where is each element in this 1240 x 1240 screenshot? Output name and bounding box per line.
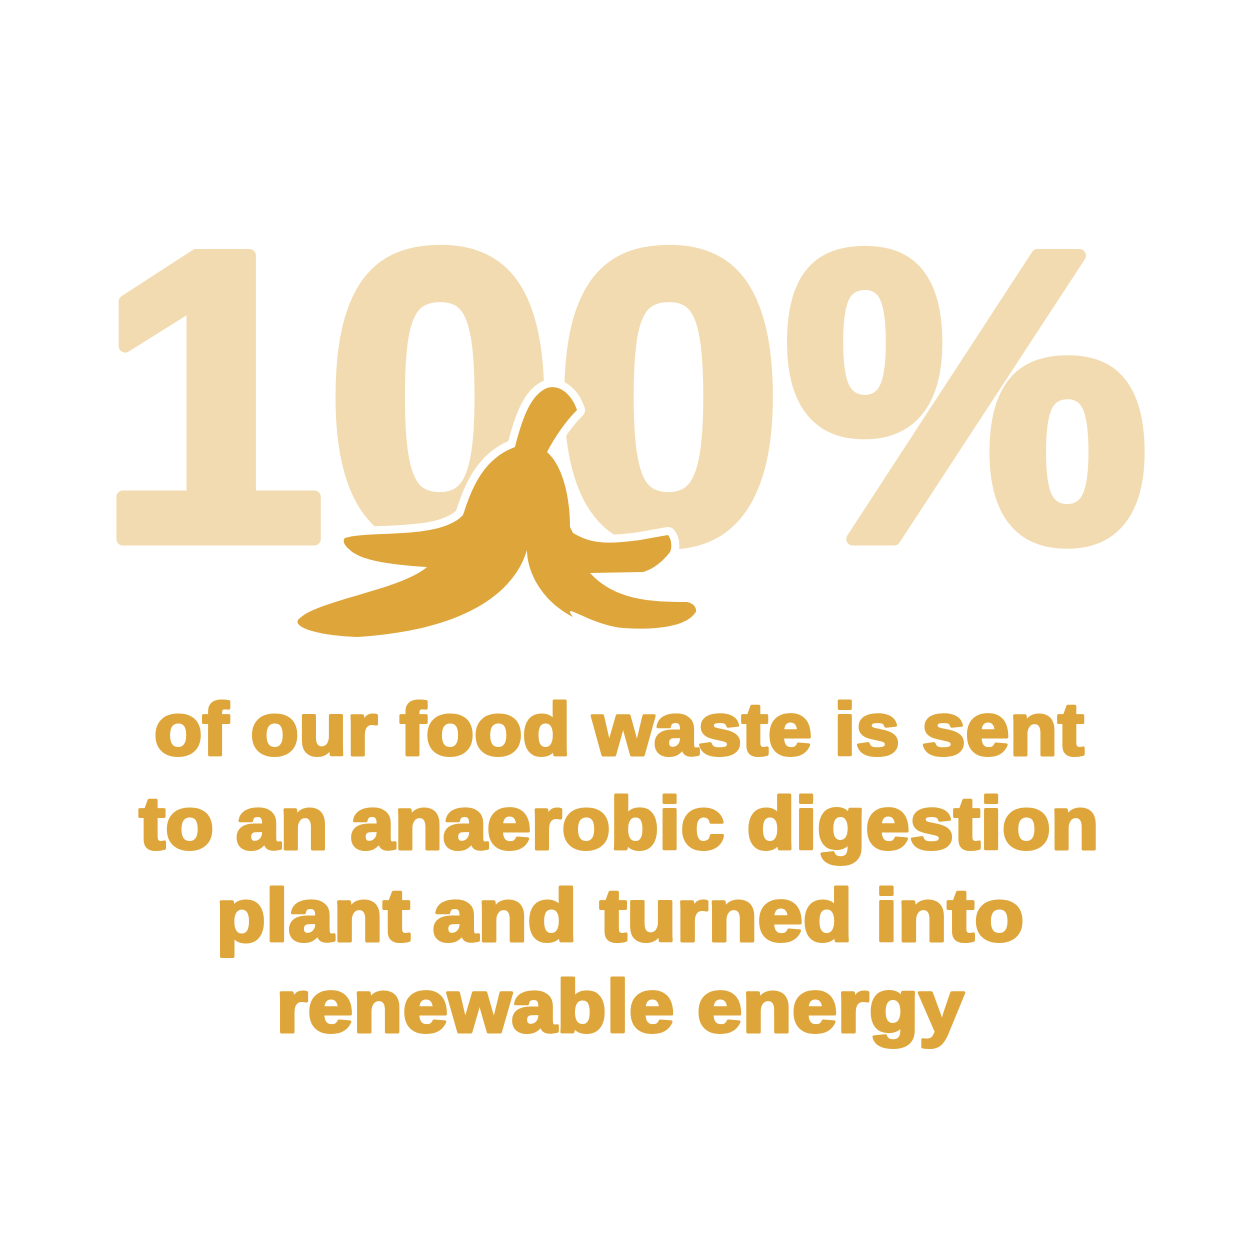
caption text: of our food waste is sent [154, 688, 1084, 771]
caption text [139, 688, 1099, 1048]
caption text: plant and turned into [216, 874, 1024, 957]
icon: banana peel [297, 387, 696, 637]
caption text: renewable energy [276, 965, 964, 1048]
big number: 100%: 100% [97, 167, 1149, 627]
caption text: to an anaerobic digestion [139, 782, 1099, 865]
